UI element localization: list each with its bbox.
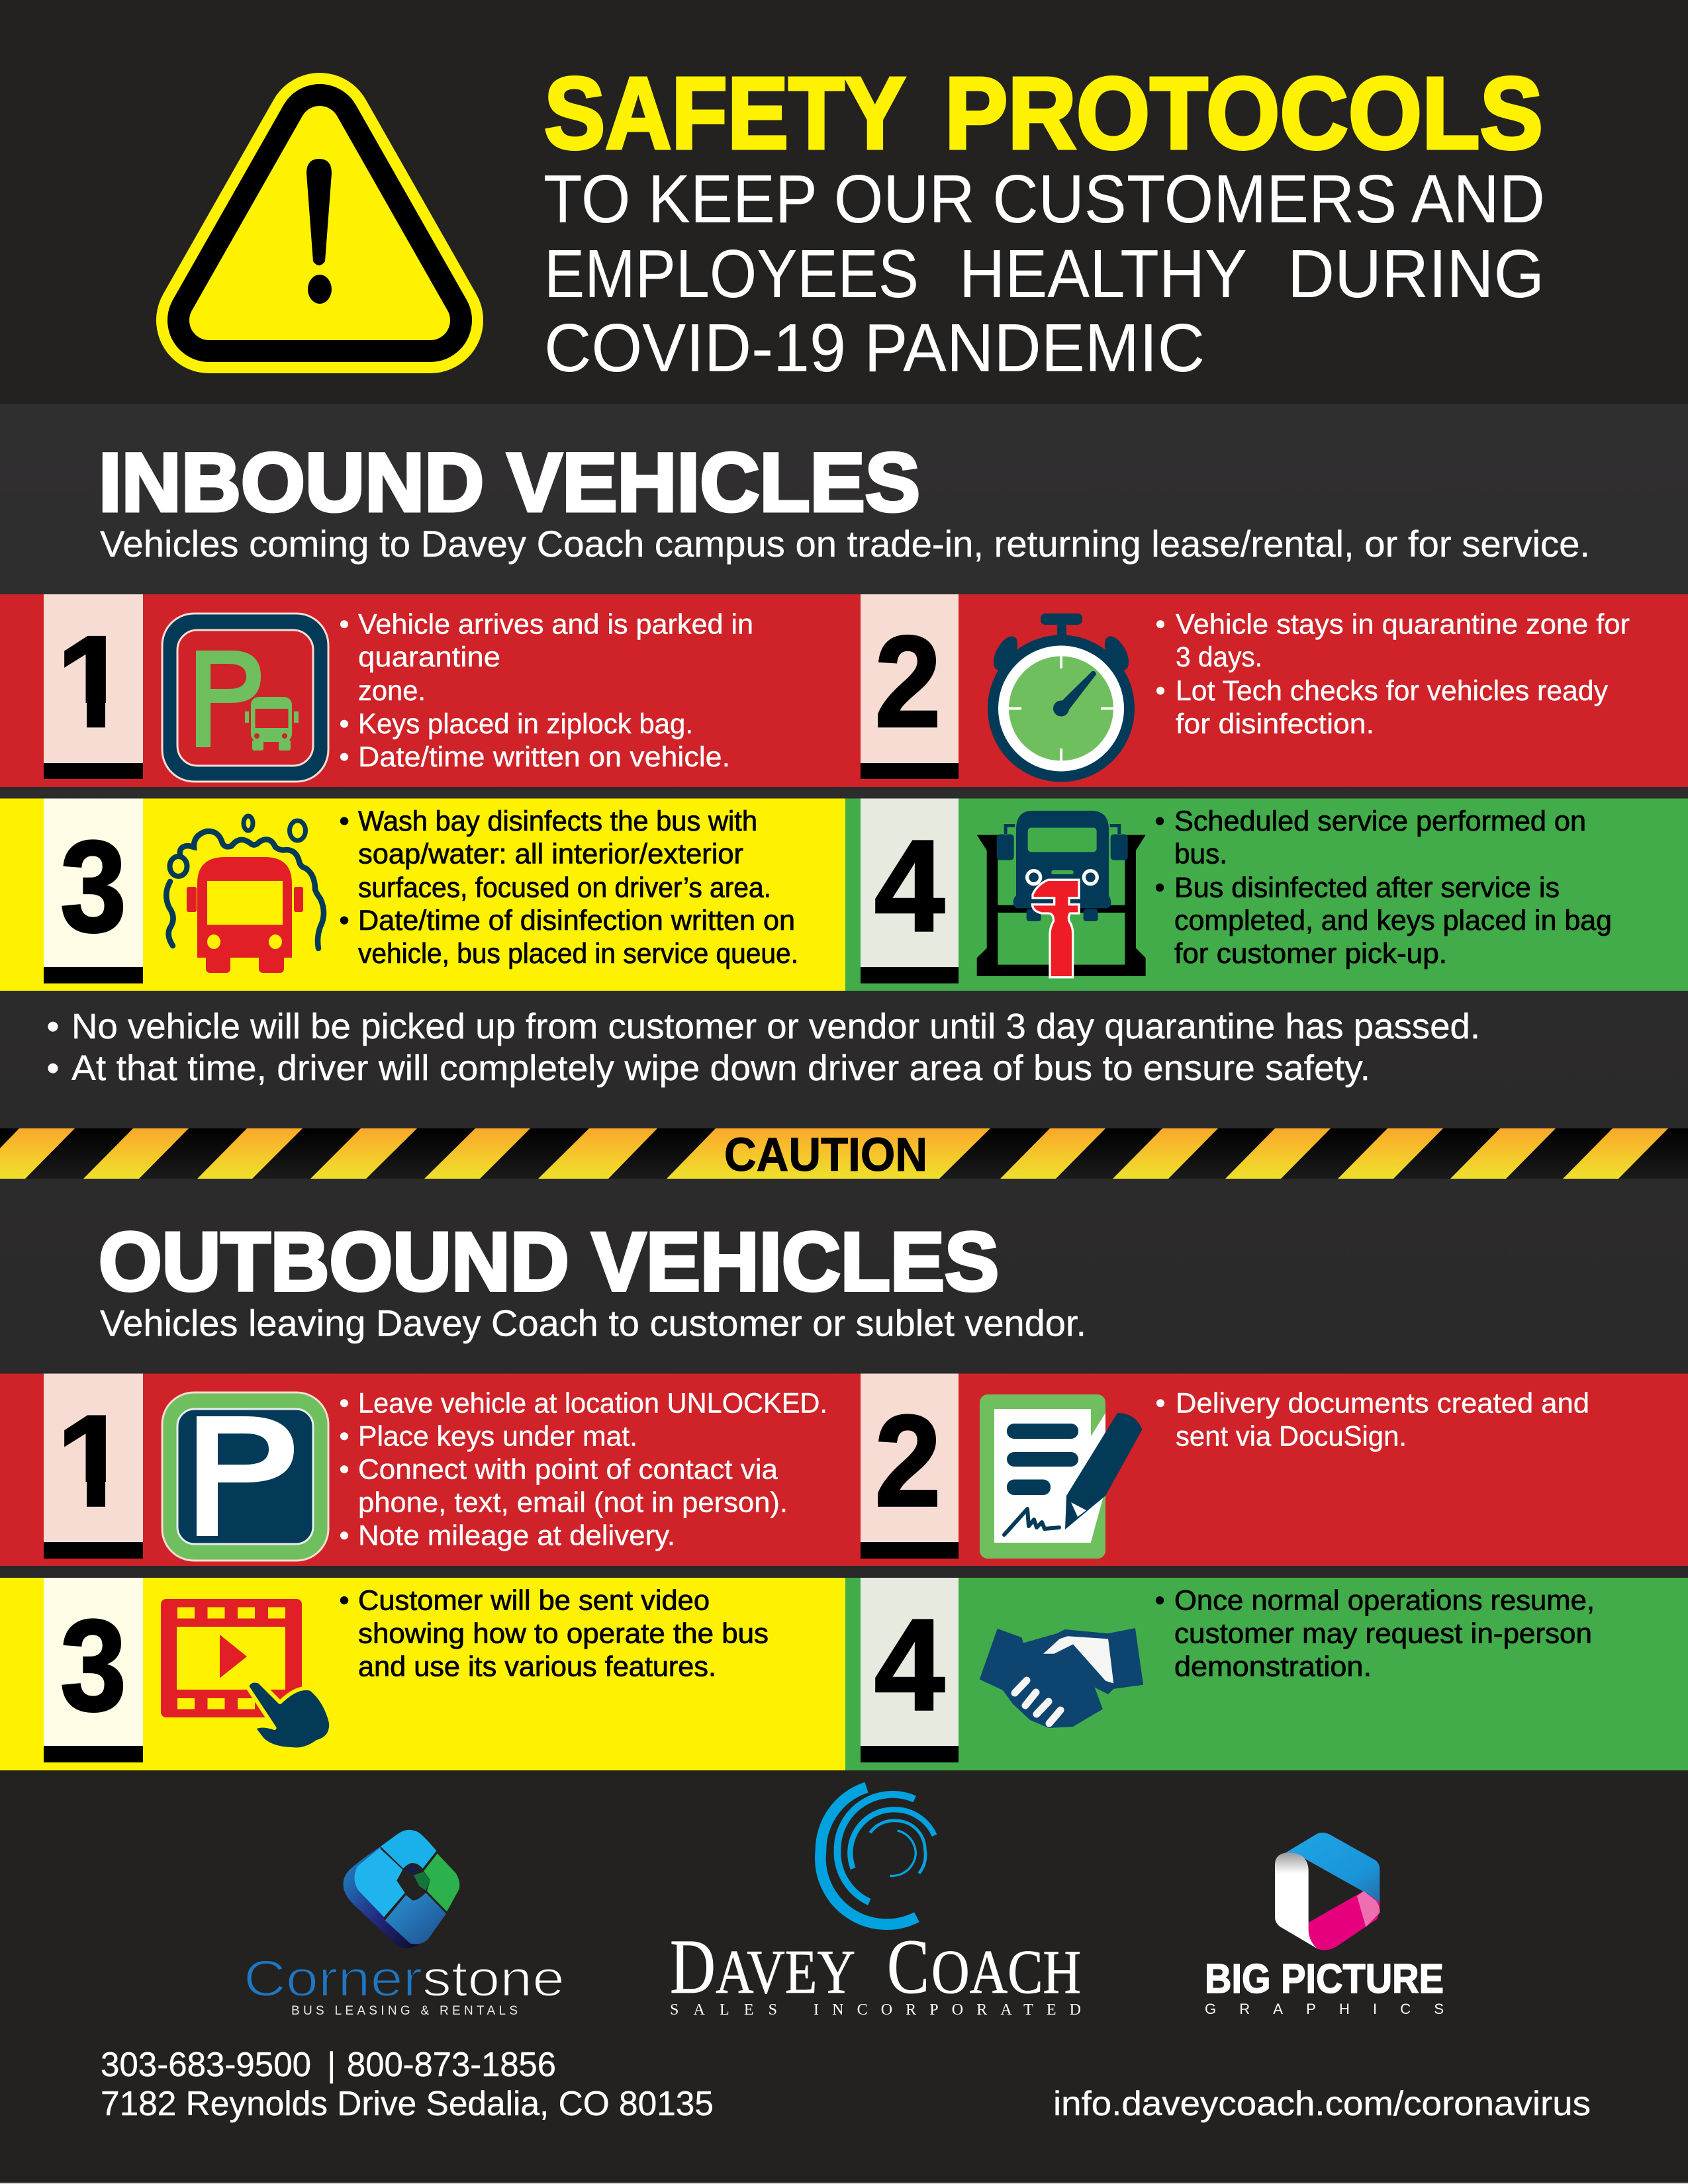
contact details: 7182 Reynolds Drive Sedalia, CO 80135 [101, 2085, 714, 2123]
text: step 3 [339, 805, 798, 970]
text: step 1: • [339, 609, 350, 641]
title: COVID-19 PANDEMIC [544, 310, 1205, 386]
icon: bus wash [166, 816, 324, 973]
icon: davey coach swirl [820, 1788, 935, 1925]
text block: inbound notes: • [47, 1048, 59, 1088]
panel: inbound step 4 [845, 798, 1688, 991]
text: step 1: Vehicle arrives and is parked in [358, 609, 753, 641]
text: step 2: sent via DocuSign. [1176, 1420, 1407, 1452]
caution tape [0, 1128, 1688, 1181]
title: DURING [1288, 236, 1544, 312]
text: step 2: Lot Tech checks for vehicles ready [1176, 675, 1608, 707]
text: step 2 [1155, 609, 1630, 740]
icon: signed document [980, 1394, 1143, 1559]
text: step 4: Bus disinfected after service is [1174, 872, 1560, 904]
text: step 1: Note mileage at delivery. [358, 1520, 675, 1552]
text: step 4: • [1154, 872, 1165, 904]
panel: outbound step 1 [0, 1374, 1688, 1566]
caution tape: CAUTION [724, 1129, 927, 1181]
logo: cornerstone: BUS LEASING & RENTALS [291, 2004, 518, 2018]
text block: inbound notes [47, 1007, 1480, 1088]
text: step 3: Wash bay disinfects the bus with [358, 805, 757, 837]
logo: big picture graphics: BIG PICTURE [1205, 1956, 1444, 2002]
panel: outbound step 1: 1 [57, 1388, 129, 1533]
icon: video with pointing hand [161, 1599, 331, 1750]
text: step 1: zone. [358, 675, 426, 707]
logo: davey coach: C [887, 1923, 929, 2010]
icon: parking sign [162, 1392, 328, 1561]
title: PROTOCOLS [945, 56, 1543, 170]
contact details [101, 2046, 714, 2123]
panel: inbound step 4: 4 [874, 813, 945, 958]
logo: davey coach: D [670, 1923, 716, 2010]
text: step 1: • [339, 708, 350, 740]
title: SAFETY [544, 56, 906, 170]
panel: inbound step 1: 1 [57, 609, 129, 754]
heading: inbound vehicles [99, 437, 1590, 565]
text: step 1 [339, 1388, 827, 1552]
logo: davey coach [670, 1788, 1081, 2019]
inbound section background [0, 404, 1688, 1128]
text block: inbound notes: • [47, 1007, 59, 1046]
panel: outbound step 3: 3 [60, 1593, 126, 1738]
panel: inbound step 2: 2 [875, 609, 941, 754]
logo: davey coach: OACH [931, 1938, 1081, 2007]
text: step 1: quarantine [358, 641, 500, 673]
title [543, 56, 1545, 386]
text: step 3: Date/time of disinfection written on [358, 905, 795, 936]
panel: inbound step 2 [861, 594, 1630, 782]
text: step 3: • [339, 905, 350, 936]
text: step 1: Connect with point of contact via [358, 1454, 778, 1486]
heading: inbound vehicles: Vehicles coming to Davey Coach campus on trade-in, returning lease/rental, or for service. [100, 523, 1590, 565]
footer background [0, 1770, 1688, 2184]
logo: davey coach: SALES [670, 2001, 777, 2019]
title: TO KEEP OUR CUSTOMERS AND [543, 161, 1545, 237]
text: step 2: Delivery documents created and [1176, 1388, 1589, 1420]
heading: outbound vehicles [99, 1216, 1086, 1343]
contact details: | [327, 2046, 336, 2084]
text: step 4: Scheduled service performed on [1174, 805, 1586, 837]
panel: outbound step 2: 2 [875, 1388, 941, 1533]
panel: inbound step 3 [0, 798, 845, 991]
heading: inbound vehicles: INBOUND VEHICLES [99, 437, 920, 529]
contact details: 800-873-1856 [347, 2046, 556, 2084]
text: step 4: completed, and keys placed in bag [1174, 905, 1612, 936]
icon: stopwatch [988, 614, 1135, 782]
icon: big picture mark [1275, 1833, 1380, 1950]
logo: cornerstone [244, 1830, 565, 2018]
text: step 3: vehicle, bus placed in service queue. [358, 938, 798, 970]
text: step 1: Place keys under mat. [358, 1420, 637, 1452]
panel: outbound step 2 [861, 1374, 1589, 1559]
text: step 4: bus. [1174, 838, 1227, 870]
text: step 4: customer may request in-person [1174, 1617, 1592, 1649]
text: step 2 [1155, 1388, 1589, 1452]
text: step 4: for customer pick-up. [1174, 938, 1447, 970]
icon: parking with bus [162, 614, 328, 782]
logo: big picture graphics [1205, 1833, 1444, 2017]
header background [0, 0, 1688, 404]
text: step 3 [339, 1585, 769, 1683]
text: step 1: Leave vehicle at location UNLOCKED. [358, 1388, 827, 1420]
text: step 2: • [1155, 675, 1166, 707]
icon: handshake [980, 1628, 1143, 1728]
text: step 2: 3 days. [1176, 641, 1262, 673]
text: step 3: and use its various features. [358, 1651, 716, 1683]
text: step 3: Customer will be sent video [358, 1585, 710, 1617]
title: HEALTHY [959, 236, 1247, 312]
text: step 3: surfaces, focused on driver’s area. [358, 872, 771, 904]
text block: inbound notes: At that time, driver will completely wipe down driver area of bus to ensure safety. [71, 1048, 1370, 1088]
logo: davey coach: AVEY [716, 1938, 855, 2007]
text: step 4 [1154, 805, 1612, 970]
text: step 4: • [1154, 1585, 1165, 1617]
heading: outbound vehicles: Vehicles leaving Davey Coach to customer or sublet vendor. [100, 1302, 1086, 1343]
panel: outbound step 4 [845, 1578, 1688, 1770]
text: step 1: • [339, 741, 350, 773]
text: step 4: Once normal operations resume, [1174, 1585, 1595, 1617]
icon: bus on lift with wrench [977, 811, 1146, 978]
text: step 3: • [339, 805, 350, 837]
text block: inbound notes: No vehicle will be picked up from customer or vendor until 3 day quarantine has passed. [71, 1007, 1480, 1046]
contact details: 303-683-9500 [101, 2046, 311, 2084]
text: step 1: • [339, 1454, 350, 1486]
text: step 1: Keys placed in ziplock bag. [358, 708, 693, 740]
text: step 1: • [339, 1520, 350, 1552]
icon: warning triangle [209, 126, 430, 320]
logo: big picture graphics: GRAPHICS [1205, 2001, 1444, 2017]
text: step 3: soap/water: all interior/exterior [358, 838, 743, 870]
text: step 4 [1154, 1585, 1595, 1683]
text: step 2: • [1155, 609, 1166, 641]
text: step 1 [339, 609, 753, 773]
heading: outbound vehicles: OUTBOUND VEHICLES [99, 1216, 999, 1308]
text: step 3: showing how to operate the bus [358, 1617, 769, 1649]
title: EMPLOYEES [544, 236, 919, 312]
logo: cornerstone: stone [422, 1950, 565, 2007]
logo: davey coach: INCORPORATED [814, 2001, 1081, 2019]
text: step 2: • [1155, 1388, 1166, 1420]
panel: inbound step 1 [0, 594, 1688, 787]
panel: outbound step 4: 4 [874, 1592, 945, 1737]
text: step 2: Vehicle stays in quarantine zone for [1176, 609, 1630, 641]
text: step 1: • [339, 1420, 350, 1452]
text: step 1: Date/time written on vehicle. [358, 741, 730, 773]
text: step 1: phone, text, email (not in person). [358, 1486, 788, 1518]
text: step 1: • [339, 1388, 350, 1420]
panel: inbound step 3: 3 [60, 814, 126, 959]
website url: info.daveycoach.com/coronavirus [1053, 2085, 1591, 2123]
text: step 3: • [339, 1585, 350, 1617]
icon: cornerstone mark [343, 1830, 459, 1948]
logo: cornerstone: Corner [244, 1950, 422, 2007]
outbound section background [0, 1179, 1688, 1770]
panel: outbound step 3 [0, 1578, 845, 1770]
text: step 4: • [1154, 805, 1165, 837]
text: step 4: demonstration. [1174, 1651, 1372, 1683]
text: step 2: for disinfection. [1176, 708, 1374, 740]
